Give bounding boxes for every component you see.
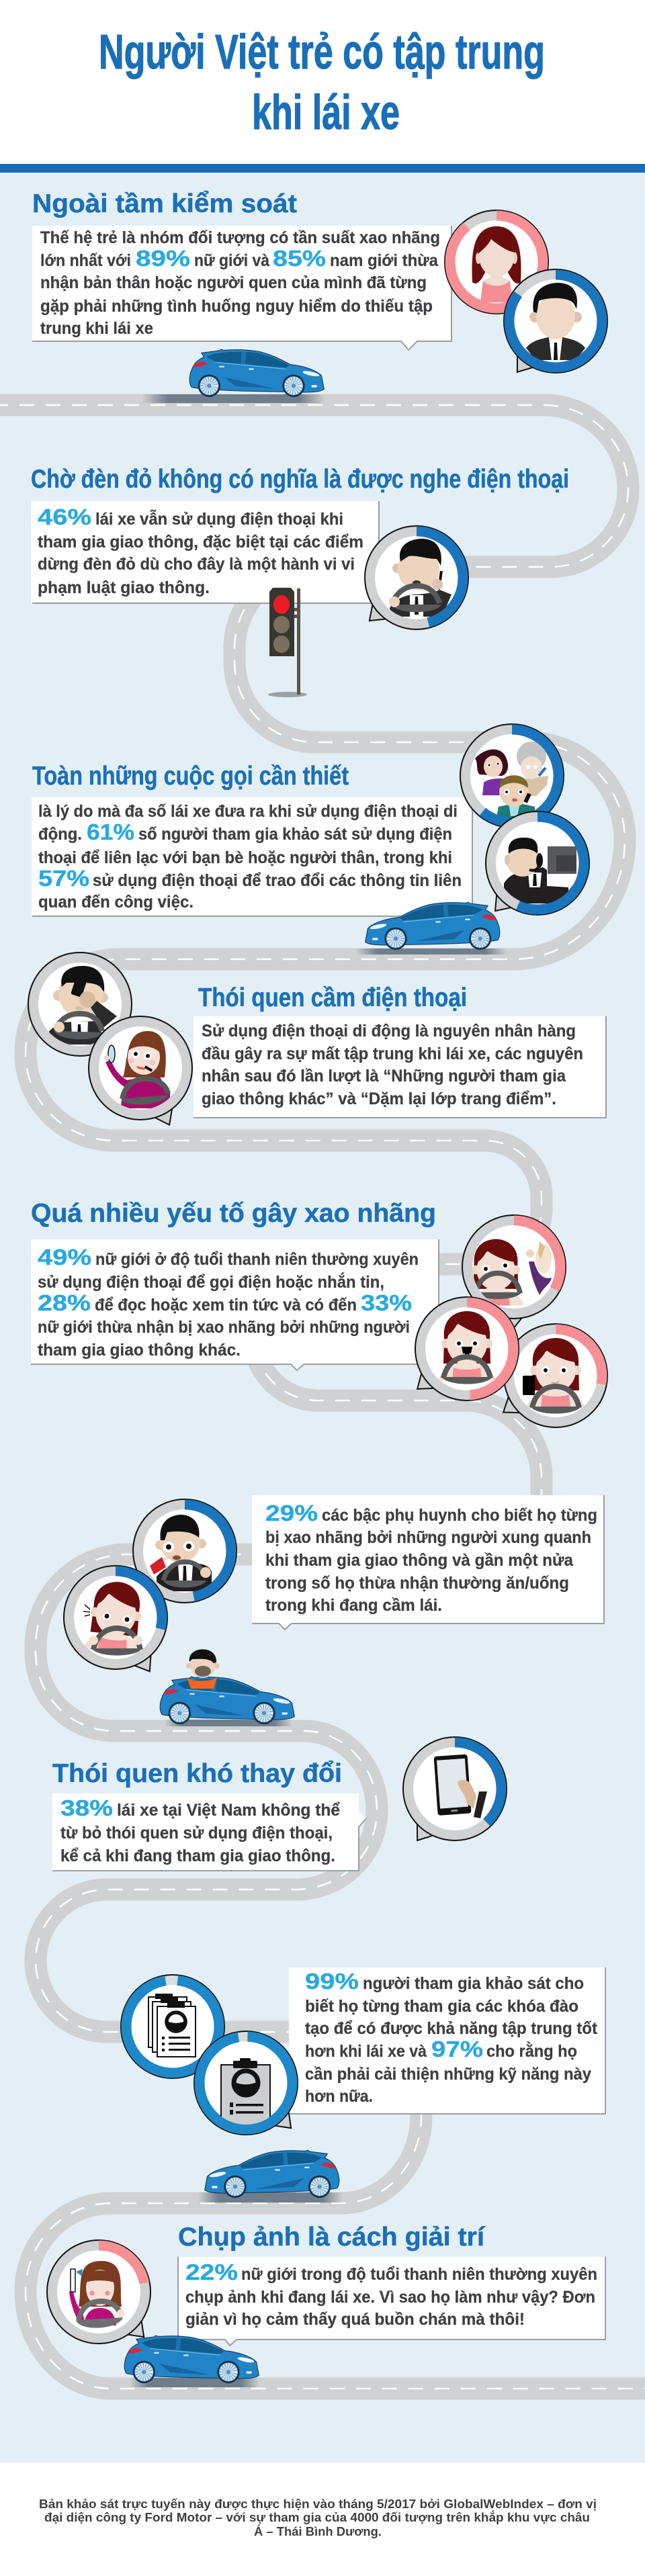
text box: tham gia giao thông khác. [38, 1341, 241, 1360]
text box: hơn nữa. [305, 2087, 373, 2106]
icon: driver on phone [360, 526, 468, 631]
text box: 38% [60, 1795, 113, 1820]
text box: 28% [38, 1290, 91, 1315]
text box: số người tham gia khảo sát sử dụng điện [138, 825, 452, 844]
heading: Thói quen khó thay đổi [52, 1759, 342, 1788]
text box [31, 1239, 439, 1370]
winding road [0, 405, 645, 2389]
text box [52, 1793, 366, 1871]
text box: nhân sau đó lần lượt là “Những người tham gia [202, 1067, 566, 1085]
icon: woman distracted by passenger [462, 1215, 566, 1331]
icon: stacked clipboards [121, 1975, 224, 2078]
text box: 33% [361, 1290, 412, 1315]
text box: sử dụng điện thoại để gọi điện hoặc nhắn tin, [38, 1272, 384, 1292]
footer source note: Á – Thái Bình Dương. [254, 2524, 382, 2538]
car 4 [198, 2150, 343, 2203]
icon: three callers [460, 724, 564, 828]
text box: khi tham gia giao thông và gần một nửa [265, 1551, 574, 1570]
text box: 61% [87, 819, 134, 844]
text box: 46% [38, 504, 91, 529]
panel: 29% phụ huynh [64, 1495, 604, 1726]
panel: 99% khóa đào tạo [121, 1967, 605, 2137]
text box: 29% [265, 1501, 318, 1525]
text box: 99% [305, 1969, 359, 1994]
text box: kể cả khi đang tham gia giao thông. [60, 1847, 335, 1865]
text box: giản vì họ cảm thấy quá buồn chán mà thôi! [185, 2310, 525, 2329]
icon: hand on phone [403, 1737, 507, 1849]
icon: woman 89% [445, 210, 548, 314]
text box [194, 1016, 606, 1118]
text box: trong số họ thừa nhận thường ăn/uống [265, 1574, 569, 1593]
text box: trong khi đang cầm lái. [265, 1596, 442, 1615]
text box: giao thông khác” và “Dặm lại lớp trang điểm”. [202, 1090, 556, 1108]
text box: lái xe vẫn sử dụng điện thoại khi [95, 508, 343, 529]
heading: Thói quen cầm điện thoại [198, 983, 467, 1012]
text box: 89% [136, 246, 190, 271]
text box [178, 2257, 605, 2346]
text box: lớn nhất với [40, 251, 131, 270]
car 1 [142, 349, 325, 403]
text box: động. [38, 825, 82, 844]
text box: tạo để có được khả năng tập trung tốt [305, 2019, 598, 2038]
text box: để đọc hoặc xem tin tức và có đến [95, 1296, 357, 1315]
text box: gặp phải những tình huống nguy hiểm do thiếu tập [40, 297, 433, 316]
icon: woman taking selfie [47, 2240, 153, 2346]
icon: man holding phone [28, 952, 132, 1056]
text box: Sử dụng điện thoại di động là nguyên nhân hàng [202, 1022, 576, 1040]
text box: các bậc phụ huynh cho biết họ từng [322, 1506, 597, 1525]
text box: bị xao nhãng bởi những người xung quanh [265, 1528, 591, 1547]
text box: từ bỏ thói quen sử dụng điện thoại, [60, 1824, 333, 1842]
icon: man drinking [133, 1499, 236, 1603]
text box: Thế hệ trẻ là nhóm đối tượng có tần suất xao nhãng [40, 228, 440, 247]
icon: woman reading phone on wheel [496, 1324, 607, 1427]
text box: dừng đèn đỏ dù cho đây là một hành vi vi [38, 555, 355, 574]
text box: biết họ từng tham gia các khóa đào [305, 1997, 578, 2016]
footer source note: đại diện công ty Ford Motor – với sự tham gia của 4000 đối tượng trên khắp khu vực châu [44, 2510, 590, 2524]
text box: chụp ảnh khi đang lái xe. Vì sao họ làm như vậy? Đơn [185, 2288, 595, 2307]
text box: thoại để liên lạc với bạn bè hoặc người thân, trong khi [38, 848, 452, 867]
text box: cần phải cải thiện những kỹ năng này [305, 2065, 591, 2084]
heading: Chụp ảnh là cách giải trí [178, 2223, 485, 2252]
footer source note [39, 2497, 597, 2538]
text box: nữ giới thừa nhận bị xao nhãng bởi những người [38, 1318, 410, 1337]
text box: hơn khi lái xe và [305, 2042, 427, 2061]
text box [32, 797, 472, 916]
car 3 with driver [160, 1649, 294, 1726]
panel: Chờ đèn đỏ [31, 465, 569, 697]
header bar [0, 164, 645, 173]
text box: sử dụng điện thoại để trao đổi các thông tin liên [93, 871, 462, 890]
title: khi lái xe [252, 86, 400, 140]
text box: 85% [273, 246, 326, 271]
text box: phạm luật giao thông. [38, 578, 210, 597]
text box: đầu gây ra sự mất tập trung khi lái xe, các nguyên [202, 1045, 583, 1063]
text box: nữ giới trong độ tuổi thanh niên thường xuyên [241, 2265, 597, 2284]
car 5 [124, 2336, 259, 2387]
icon: man 85% [504, 269, 607, 380]
icon: single clipboard [194, 2031, 300, 2137]
panel: Thói quen cầm điện thoại [28, 952, 606, 1131]
text box: nữ giới và [194, 251, 269, 270]
title [99, 26, 545, 140]
car 2 [356, 902, 507, 954]
icon: traffic light [268, 588, 307, 697]
heading: Toàn những cuộc gọi cần thiết [32, 762, 349, 791]
icon: office worker [485, 811, 589, 920]
text box: cho rằng họ [486, 2041, 577, 2061]
text box: quan đến công việc. [38, 893, 194, 912]
panel: Ngoài tầm kiểm soát [32, 189, 607, 403]
panel: Quá nhiều yếu tố gây xao nhãng [31, 1199, 607, 1427]
text box: 49% [38, 1245, 91, 1270]
text box [31, 501, 379, 603]
text box [32, 226, 452, 350]
text box: tham gia giao thông, đặc biệt tại các điểm [38, 533, 363, 551]
text box: người tham gia khảo sát cho [363, 1974, 584, 1993]
text box: 22% [185, 2260, 238, 2284]
text box: nữ giới ở độ tuổi thanh niên thường xuyên [95, 1250, 419, 1269]
text box: trung khi lái xe [40, 319, 153, 338]
icon: woman annoyed [64, 1566, 167, 1679]
text box: 57% [38, 866, 89, 891]
text box: 97% [431, 2037, 483, 2061]
heading: Ngoài tầm kiểm soát [32, 189, 297, 218]
heading: Quá nhiều yếu tố gây xao nhãng [31, 1199, 436, 1228]
panel: Toàn những cuộc gọi cần thiết [32, 724, 589, 954]
panel: Thói quen khó thay đổi [52, 1737, 507, 1871]
text box: nhận bản thân hoặc người quen của mình đã từng [40, 273, 427, 292]
icon: woman with phone in mouth [409, 1297, 519, 1401]
panel: Chụp ảnh là cách giải trí [47, 2223, 605, 2387]
text box: nam giới thừa [330, 251, 439, 270]
text box: lái xe tại Việt Nam không thể [117, 1801, 340, 1820]
footer source note: Bản khảo sát trực tuyến này được thực hiện vào tháng 5/2017 bởi GlobalWebIndex – đơn vị [39, 2497, 597, 2511]
text box [252, 1495, 604, 1630]
text box: là lý do mà đa số lái xe đưa ra khi sử dụng điện thoại di [38, 802, 458, 821]
text box [289, 1967, 605, 2114]
icon: woman with mirror [89, 1016, 192, 1131]
